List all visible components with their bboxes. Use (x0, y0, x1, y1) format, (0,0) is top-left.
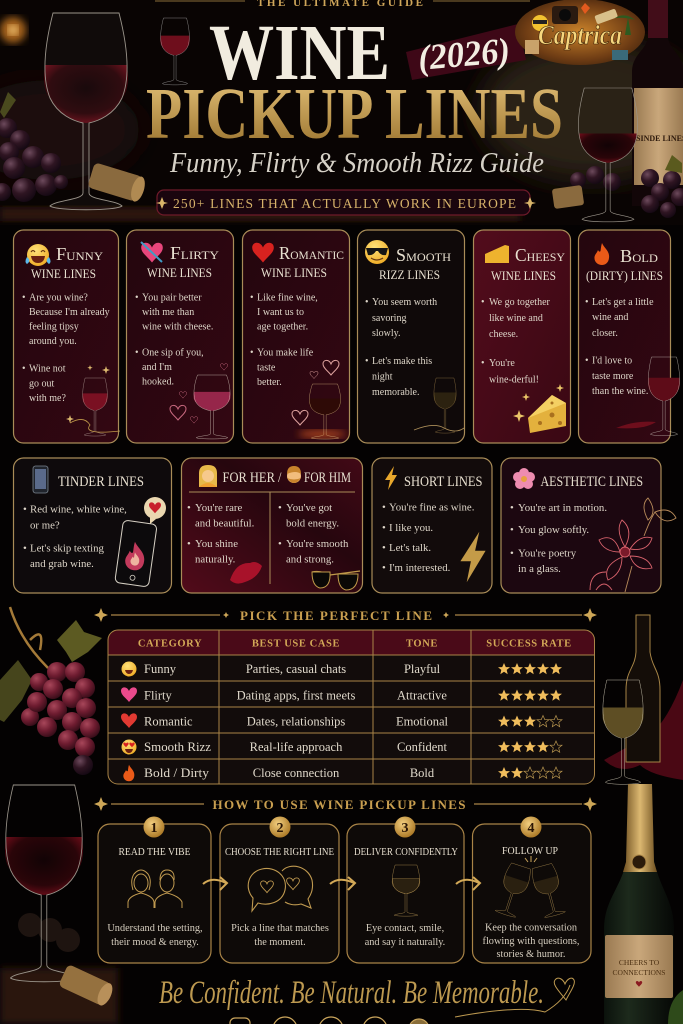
panel: bold dirty lines: closer. (592, 328, 618, 339)
panel: romantic wine lines: Romantic (279, 243, 344, 263)
icon: lips (230, 562, 262, 584)
icon: cork (58, 964, 115, 1008)
step 1: read the vibe (98, 816, 211, 963)
badge 3: 3 (402, 821, 408, 836)
panel: aesthetic lines: You're poetry (518, 548, 577, 560)
comparison table (108, 630, 594, 784)
panel: aesthetic lines: in a glass. (518, 563, 561, 575)
panel: romantic wine lines: Like fine wine, (257, 292, 318, 304)
icon: laughing emoji (26, 244, 50, 266)
row: bold dirty (123, 765, 562, 781)
step 2: choose the right line: Pick a line that matches (231, 923, 329, 934)
panel: aesthetic lines (501, 458, 676, 593)
panel: for her / for him: You're smooth (286, 538, 349, 550)
step 2: choose the right line: CHOOSE THE RIGHT LINE (225, 847, 334, 858)
panel: funny wine lines: • (22, 364, 26, 374)
panel: for her / for him: FOR HER / (222, 470, 282, 486)
panel: funny wine lines: Because I'm already (29, 307, 110, 318)
icon: lightning emoji (385, 466, 397, 490)
panel: flirty wine lines: WINE LINES (147, 265, 212, 280)
panel: funny wine lines: WINE LINES (31, 266, 96, 281)
icon: line-art flower (590, 498, 676, 592)
panel: smooth rizz lines: • (365, 356, 369, 367)
subtitle: Funny, Flirty & Smooth Rizz Guide (169, 147, 544, 179)
panel: tinder lines: Let's skip texting (30, 542, 105, 554)
panel: romantic wine lines: WINE LINES (261, 265, 327, 280)
panel: smooth rizz lines: RIZZ LINES (379, 267, 440, 282)
badge 3 (394, 816, 416, 838)
row: flirty: Flirty (144, 688, 173, 702)
arrow: step 1 to 2 (203, 877, 227, 890)
banner: 250+ lines: 250+ LINES THAT ACTUALLY WORK IN EUROPE (173, 196, 516, 211)
panel: bold dirty lines: taste more (592, 371, 634, 382)
row: flirty: Dating apps, first meets (237, 688, 355, 702)
panel: funny wine lines: Funny (56, 244, 103, 264)
step 2: choose the right line (220, 816, 339, 963)
comparison table: TONE (406, 638, 438, 650)
panel: flirty wine lines: Flirty (170, 243, 219, 263)
icon: gold outline glass (414, 378, 464, 433)
icon: outlined glass (392, 865, 420, 916)
arrow: step 2 to 3 (330, 877, 355, 890)
row: smooth rizz (122, 740, 562, 754)
panel: smooth rizz lines: night (372, 372, 393, 382)
panel: aesthetic lines: You glow softly. (518, 524, 589, 536)
icon: clinking glasses (493, 856, 567, 919)
icon: red wine glass with splash (616, 357, 680, 436)
panel: romantic wine lines: better. (257, 377, 282, 388)
cork left (87, 162, 147, 203)
icon: speech bubbles with hearts (248, 866, 313, 911)
panel: bold dirty lines: Let's get a little (592, 297, 654, 308)
comparison table: CATEGORY (138, 638, 202, 650)
step 1: read the vibe: READ THE VIBE (118, 847, 190, 858)
row: romantic: Romantic (144, 714, 193, 728)
panel: for her / for him: • (187, 502, 191, 514)
panel: flirty wine lines: wine with cheese. (142, 322, 213, 332)
row: funny: Playful (404, 662, 441, 676)
panel: for her / for him: You've got (286, 502, 332, 514)
grapes top left (0, 92, 68, 202)
panel: tinder lines: • (23, 542, 27, 554)
banner: 250+ lines (156, 190, 536, 215)
row: funny: Parties, casual chats (246, 662, 346, 676)
panel: bold dirty lines: • (585, 356, 589, 366)
badge 1: 1 (150, 821, 158, 836)
panel: for her / for him (182, 458, 362, 593)
icon: man emoji (287, 466, 301, 483)
panel: flirty wine lines: You pair better (142, 292, 202, 304)
panel: tinder lines: TINDER LINES (58, 474, 144, 490)
panel: bold dirty lines: Bold (620, 246, 658, 266)
row: flirty (121, 687, 562, 702)
icon: rose glass with hearts (170, 364, 230, 439)
step 4: follow up: FOLLOW UP (502, 846, 558, 857)
captrica logo badge: Captrica (538, 20, 622, 50)
step 1: read the vibe: their mood & energy. (111, 937, 199, 948)
icon: heart with arrow (141, 242, 163, 262)
icon: woman emoji (199, 465, 217, 487)
panel: cheesy wine lines: You're (489, 358, 515, 369)
badge 2: 2 (276, 821, 284, 836)
panel: flirty wine lines: One sip of you, (142, 348, 204, 358)
badge 4: 4 (528, 821, 534, 836)
panel: for her / for him: You shine (195, 538, 238, 550)
champagne bottle: CONNECTIONS (613, 968, 665, 977)
panel: flirty wine lines: with me than (142, 307, 194, 318)
comparison table: BEST USE CASE (252, 638, 340, 650)
panel: smooth rizz lines: • (365, 297, 369, 308)
panel: for her / for him: • (278, 538, 282, 550)
icon: phone with flame and heart bubble (115, 497, 166, 587)
panel: funny wine lines: feeling tipsy (29, 322, 79, 332)
panel: aesthetic lines: • (510, 548, 514, 560)
row: romantic: Dates, relationships (247, 714, 345, 728)
step 3: deliver confidently: Eye contact, smile, (366, 923, 444, 934)
panel: bold dirty lines: (DIRTY) LINES (586, 268, 663, 283)
panel: romantic wine lines (242, 230, 350, 443)
panel: bold dirty lines: I'd love to (592, 356, 632, 366)
panel: funny wine lines: around you. (29, 336, 77, 347)
step 3: deliver confidently: and say it naturally. (365, 937, 445, 948)
comparison table: SUCCESS RATE (486, 638, 572, 650)
panel: tinder lines (14, 458, 172, 593)
panel: cheesy wine lines: • (481, 297, 485, 308)
panel: funny wine lines (14, 230, 120, 443)
panel: cheesy wine lines: We go together (489, 297, 551, 308)
row: bold dirty: Bold (410, 766, 435, 780)
row: smooth rizz: Smooth Rizz (144, 740, 211, 754)
section heading: how to use: HOW TO USE WINE PICKUP LINES (212, 797, 468, 812)
small wine glass by title (160, 18, 190, 85)
icon: sunglasses (312, 571, 360, 590)
panel: smooth rizz lines: You seem worth (372, 297, 437, 308)
panel: funny wine lines: with me? (29, 393, 66, 404)
grape bunch and leaves by table (0, 607, 102, 775)
right glass with grapes and cork (552, 88, 683, 222)
step 4: follow up: flowing with questions, (483, 936, 579, 947)
step 2: choose the right line: the moment. (254, 937, 306, 948)
panel: short lines: SHORT LINES (404, 474, 482, 490)
row: romantic: Emotional (396, 714, 449, 728)
arrow: step 3 to 4 (456, 877, 480, 890)
panel: short lines: • (382, 562, 386, 574)
panel: cheesy wine lines: WINE LINES (491, 268, 556, 283)
panel: short lines: I'm interested. (389, 562, 450, 574)
step 3: deliver confidently (347, 816, 464, 963)
panel: funny wine lines: go out (29, 378, 54, 390)
panel: for her / for him: naturally. (195, 554, 235, 566)
panel: smooth rizz lines: Smooth (396, 245, 451, 265)
panel: aesthetic lines: • (510, 502, 514, 514)
large red wine glass left (44, 13, 128, 210)
panel: funny wine lines: Wine not (29, 364, 66, 374)
badge 4 (520, 816, 542, 838)
panel: aesthetic lines: You're art in motion. (518, 502, 607, 514)
panel: cheesy wine lines: cheese. (489, 329, 518, 340)
panel: flirty wine lines: • (135, 348, 139, 358)
panel: for her / for him: bold energy. (286, 518, 339, 530)
panel: smooth rizz lines: slowly. (372, 328, 401, 339)
section heading: how to use (94, 797, 597, 812)
icon: amber glass with hearts (292, 360, 346, 439)
panel: cheesy wine lines (474, 230, 570, 443)
panel: romantic wine lines: • (250, 348, 254, 358)
panel: cheesy wine lines: wine-derful! (489, 374, 539, 386)
section heading: pick the perfect line: PICK THE PERFECT LINE (240, 608, 434, 623)
panel: romantic wine lines: • (250, 292, 254, 304)
year tag (2026): (2026) (416, 30, 511, 78)
panel: cheesy wine lines: Cheesy (515, 245, 565, 265)
panel: flirty wine lines (126, 230, 234, 443)
panel: romantic wine lines: taste (257, 362, 276, 374)
panel: for her / for him: • (278, 502, 282, 514)
panel: short lines: I like you. (389, 522, 433, 534)
panel: aesthetic lines: AESTHETIC LINES (540, 474, 643, 490)
panel: bold dirty lines (578, 230, 680, 443)
icon: red heart (252, 243, 274, 262)
social icons (230, 1017, 429, 1024)
panel: for her / for him: and beautiful. (195, 518, 254, 530)
panel: short lines: • (382, 542, 386, 554)
icon: cheese wedge with sparkles (513, 384, 566, 433)
panel: tinder lines: Red wine, white wine, (30, 504, 127, 516)
step 4: follow up (472, 816, 591, 963)
row: funny (122, 662, 562, 676)
panel: smooth rizz lines (358, 230, 464, 443)
title: wine: WINE (209, 10, 390, 97)
panel: for her / for him: and strong. (286, 554, 334, 566)
panel: cheesy wine lines: like wine and (489, 313, 543, 324)
step 4: follow up: stories & humor. (497, 949, 565, 960)
panel: romantic wine lines: age together. (257, 322, 308, 332)
step 4: follow up: Keep the conversation (485, 922, 577, 934)
panel: for her / for him: • (187, 538, 191, 550)
gold outline bottle, glass and splash (602, 615, 683, 784)
panel: cheesy wine lines: • (481, 358, 485, 369)
panel: tinder lines: or me? (30, 520, 60, 532)
panel: flirty wine lines: hooked. (142, 376, 174, 388)
row: smooth rizz: Real-life approach (250, 740, 343, 754)
section heading: pick the perfect line (94, 608, 597, 623)
panel: short lines: • (382, 502, 386, 514)
panel: short lines (372, 458, 492, 593)
panel: funny wine lines: • (22, 292, 26, 304)
row: bold dirty: Close connection (253, 766, 340, 780)
panel: flirty wine lines: • (135, 292, 139, 304)
row: romantic (121, 713, 562, 728)
panel: for her / for him: You're rare (195, 502, 243, 514)
icon: cherry blossom emoji (513, 468, 535, 489)
panel: for her / for him: FOR HIM (304, 470, 351, 486)
icon: fire emoji (594, 243, 609, 265)
icon: wine glass with sparkles (66, 365, 120, 436)
captrica logo badge (515, 0, 645, 65)
badge 1 (144, 816, 164, 838)
panel: smooth rizz lines: savoring (372, 313, 406, 324)
panel: smooth rizz lines: Let's make this (372, 356, 432, 367)
row: smooth rizz: Confident (397, 740, 448, 754)
panel: bold dirty lines: wine and (592, 312, 628, 323)
panel: romantic wine lines: I want us to (257, 307, 304, 318)
icon: smartphone emoji (33, 466, 48, 493)
red wine bottle right (632, 0, 683, 206)
icon: gold lightning bolt (460, 532, 486, 582)
panel: aesthetic lines: • (510, 524, 514, 536)
panel: short lines: Let's talk. (389, 542, 431, 554)
icon: cheese emoji (485, 245, 509, 263)
panel: tinder lines: • (23, 504, 27, 516)
champagne bottle: CHEERS TO (619, 958, 660, 967)
row: funny: Funny (144, 662, 177, 676)
panel: smooth rizz lines: memorable. (372, 387, 419, 398)
row: flirty: Attractive (397, 688, 447, 702)
row: bold dirty: Bold / Dirty (144, 766, 210, 780)
icon: two people (128, 870, 182, 908)
panel: bold dirty lines: • (585, 297, 589, 308)
badge 2 (270, 816, 290, 838)
step 1: read the vibe: Understand the setting, (107, 923, 203, 934)
panel: funny wine lines: Are you wine? (29, 292, 88, 304)
panel: romantic wine lines: You make life (257, 348, 314, 358)
panel: flirty wine lines: and I'm (142, 362, 172, 373)
step 3: deliver confidently: DELIVER CONFIDENTLY (354, 847, 458, 858)
panel: tinder lines: and grab wine. (30, 558, 94, 570)
panel: bold dirty lines: than the wine. (592, 386, 648, 397)
bottom left red wine glass (0, 785, 118, 1024)
title: pickup lines: PICKUP LINES (146, 73, 563, 154)
panel: short lines: • (382, 522, 386, 534)
panel: short lines: You're fine as wine. (389, 502, 474, 514)
icon: sunglasses emoji (365, 240, 389, 264)
champagne bottle (604, 784, 683, 1024)
